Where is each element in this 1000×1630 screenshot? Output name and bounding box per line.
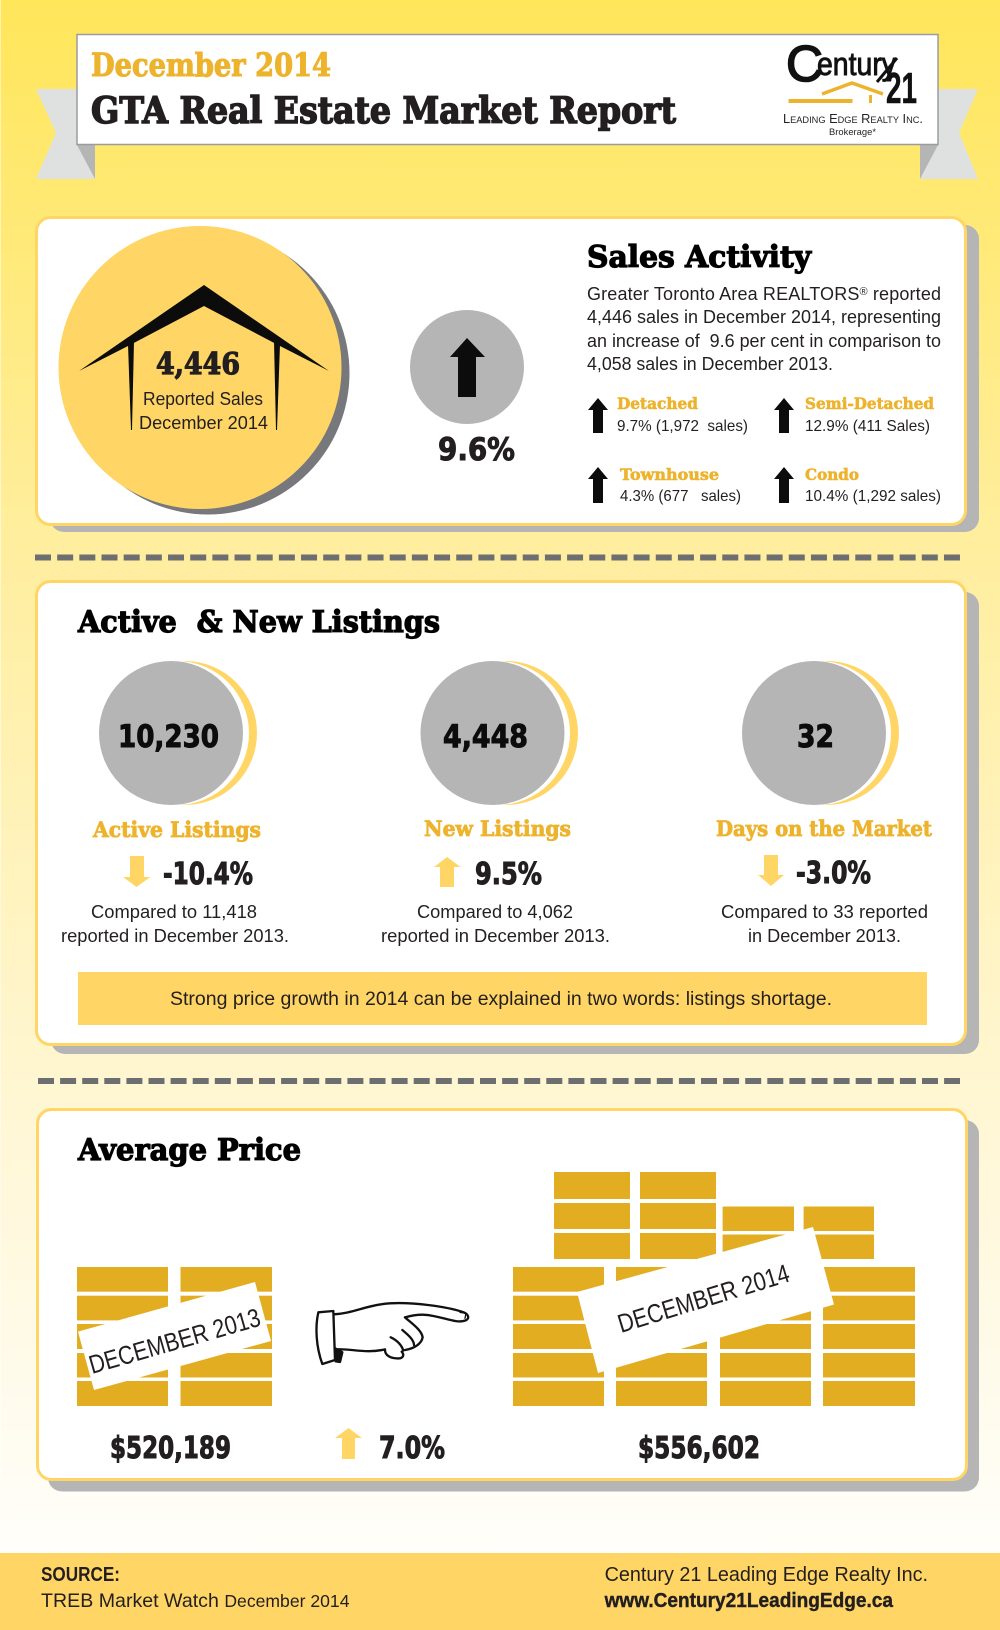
logo: Century 21	[783, 35, 923, 137]
metric: days on the market: Compared to 33 reported	[721, 902, 928, 922]
source text: TREB Market Watch December 2014	[41, 1590, 350, 1612]
big circle with house	[58, 226, 350, 514]
logo: Century 21: Leading Edge Realty Inc.	[783, 112, 923, 126]
stat: condo: Condo	[805, 465, 859, 484]
metric: active listings	[61, 661, 289, 946]
value: 4,446: 4,446	[156, 347, 240, 382]
title: GTA Real Estate Market Report: GTA Real Estate Market Report	[91, 90, 676, 132]
logo: Century 21: Brokerage*	[829, 127, 877, 137]
heading: sales activity: Sales Activity	[587, 240, 813, 275]
brick stack: december 2014	[513, 1172, 915, 1406]
sales activity paragraph: an increase of 9.6 per cent in comparison to	[587, 331, 941, 351]
caption: reported sales: Reported Sales	[143, 389, 263, 409]
footer	[0, 1553, 1000, 1630]
metric: active listings: Compared to 11,418	[91, 902, 257, 922]
website: www.Century21LeadingEdge.ca	[604, 1590, 894, 1612]
logo: Century 21: entury	[817, 46, 896, 82]
stat: semi-detached: Semi-Detached	[805, 394, 934, 413]
icon: pointing hand	[316, 1303, 468, 1364]
metric: new listings	[381, 661, 610, 946]
panel: sales activity	[36, 218, 979, 532]
company name: Century 21 Leading Edge Realty Inc.	[605, 1564, 928, 1586]
callout: listings shortage	[78, 972, 927, 1025]
stat: condo	[774, 465, 941, 505]
value: $520,189: $520,189	[110, 1431, 231, 1466]
caption: december 2014: December 2014	[139, 413, 268, 433]
panel: average price	[38, 1110, 979, 1492]
label: december 2014: DECEMBER 2014	[614, 1258, 793, 1339]
stat: semi-detached: 12.9% (411 Sales)	[805, 418, 930, 435]
stat: townhouse: Townhouse	[620, 465, 719, 484]
metric: new listings: Compared to 4,062	[417, 902, 573, 922]
label: december 2013: DECEMBER 2013	[85, 1302, 264, 1380]
sales activity paragraph: ®	[859, 286, 868, 298]
header ribbon	[36, 34, 978, 179]
metric: days on the market: 32	[797, 719, 834, 755]
metric: days on the market: Days on the Market	[716, 816, 932, 841]
metric: active listings: -10.4%	[163, 857, 253, 892]
brick stack: december 2013	[77, 1267, 272, 1406]
metric: days on the market	[716, 661, 932, 946]
value: $556,602: $556,602	[638, 1431, 760, 1466]
metric: days on the market: in December 2013.	[748, 926, 901, 946]
label: december 2014	[577, 1227, 834, 1373]
metric: days on the market: -3.0%	[796, 856, 871, 891]
heading: active and new listings: Active & New Listings	[77, 605, 440, 640]
sales activity paragraph: reported	[868, 284, 941, 304]
source heading: SOURCE:	[41, 1564, 120, 1586]
value: 7.0%: 7.0%	[379, 1431, 445, 1466]
value: 9.6%: 9.6%	[438, 432, 515, 468]
panel: active and new listings	[36, 582, 979, 1054]
logo: Century 21: C	[786, 35, 823, 92]
sales activity paragraph: 4,446 sales in December 2014, representing	[587, 307, 941, 327]
stat: detached	[588, 394, 748, 435]
callout: listings shortage: Strong price growth in 2014 can be explained in two words: listings shortage.	[170, 989, 832, 1010]
metric: active listings: Active Listings	[92, 817, 261, 842]
metric: new listings: 9.5%	[475, 857, 542, 892]
stat: condo: 10.4% (1,292 sales)	[805, 488, 941, 505]
metric: new listings: New Listings	[424, 816, 571, 841]
arrow: price up	[335, 1428, 362, 1459]
stat: semi-detached	[774, 394, 934, 435]
metric: new listings: reported in December 2013.	[381, 926, 610, 946]
label: december 2013	[78, 1282, 271, 1390]
metric: new listings: 4,448	[443, 719, 528, 755]
stat: townhouse	[588, 465, 741, 505]
title: December 2014: December 2014	[91, 46, 331, 84]
stat: townhouse: 4.3% (677 sales)	[620, 488, 741, 505]
stat: detached: 9.7% (1,972 sales)	[617, 418, 748, 435]
stat: detached: Detached	[617, 394, 698, 413]
sales activity paragraph: 4,058 sales in December 2013.	[587, 354, 833, 374]
circle with up arrow	[410, 310, 524, 424]
metric: active listings: reported in December 2013.	[61, 926, 289, 946]
metric: active listings: 10,230	[118, 719, 219, 755]
logo: Century 21: 21	[886, 64, 917, 113]
sales activity paragraph	[587, 284, 941, 374]
sales activity paragraph: Greater Toronto Area REALTORS	[587, 284, 859, 304]
heading: average price: Average Price	[77, 1133, 301, 1168]
